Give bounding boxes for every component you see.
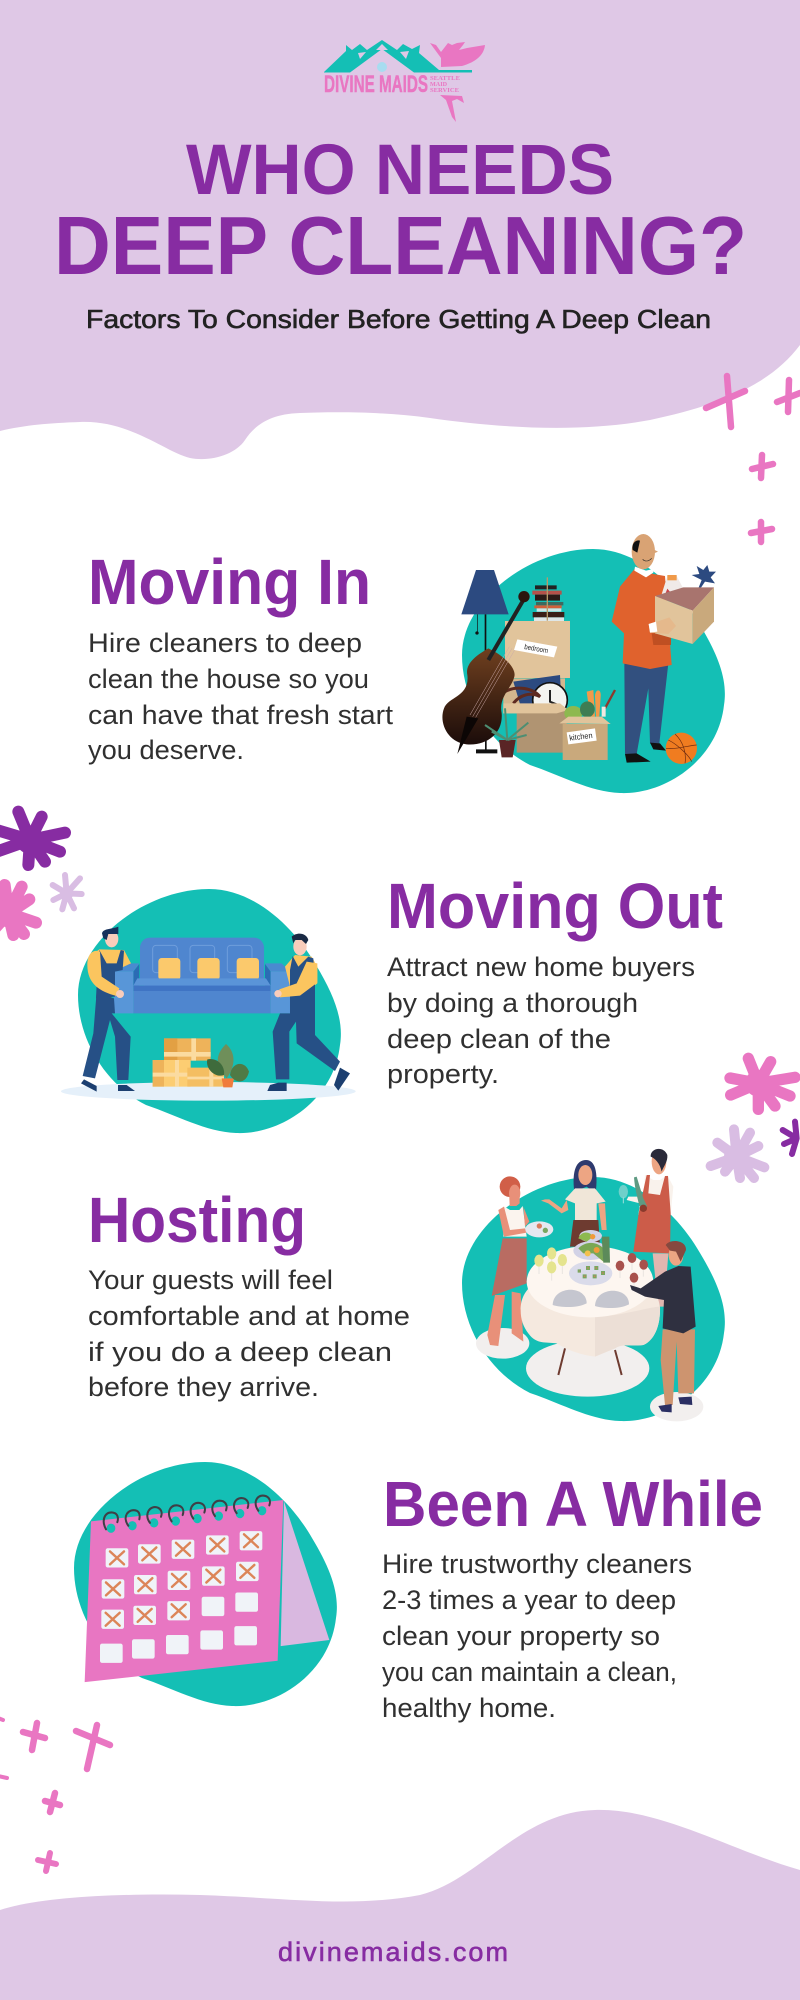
section: Moving In text: you deserve. xyxy=(88,735,244,765)
man in orange sweater holding a box xyxy=(612,534,716,763)
box: kitchen: kitchen xyxy=(569,731,593,743)
box: kitchen xyxy=(559,690,615,760)
box: open with clock and cloth xyxy=(503,675,568,753)
decorative pink sparkles top right xyxy=(706,376,800,542)
calendar day cells xyxy=(100,1531,262,1663)
section: Been A While text: clean your property so xyxy=(382,1621,660,1651)
woman in the middle xyxy=(541,1160,607,1247)
section: Moving Out text: Attract new home buyers xyxy=(387,952,695,982)
section: Moving In text: Moving In xyxy=(88,546,371,618)
basketball xyxy=(666,733,697,764)
box: bedroom with books: bedroom xyxy=(524,642,549,655)
decorative flowers left xyxy=(0,812,82,935)
section: Moving Out text: property. xyxy=(387,1059,499,1089)
double bass xyxy=(442,591,530,754)
man in dark sweater xyxy=(630,1241,696,1412)
section: Moving In text: clean the house so you xyxy=(88,664,369,694)
section: Moving Out text xyxy=(387,870,723,1089)
section: Moving Out text: by doing a thorough xyxy=(387,988,638,1018)
section: Moving In text xyxy=(88,546,394,765)
woman with plate xyxy=(487,1176,553,1346)
section: Moving In text: can have that fresh start xyxy=(88,700,394,730)
section: Hosting text: before they arrive. xyxy=(88,1372,319,1402)
title: WHO NEEDS xyxy=(186,131,614,210)
section: Hosting text: Hosting xyxy=(88,1184,306,1256)
section: Been A While text: Been A While xyxy=(383,1468,763,1540)
box: bedroom with books xyxy=(505,577,570,678)
footer website: divinemaids.com xyxy=(278,1937,508,1967)
potted plant xyxy=(485,708,528,757)
logo: Divine Maids: SERVICE xyxy=(430,88,459,94)
decorative flowers right xyxy=(711,1058,797,1178)
illustration: man moving in with boxes xyxy=(442,534,725,793)
subtitle: Factors To Consider Before Getting A Deep Clean xyxy=(86,304,711,334)
logo: Divine Maids xyxy=(324,40,485,122)
section: Hosting text: comfortable and at home xyxy=(88,1301,410,1331)
section: Hosting text xyxy=(88,1184,410,1402)
woman in apron with bottle and glass xyxy=(619,1149,673,1307)
header background shape xyxy=(0,0,800,459)
logo: Divine Maids: SEATTLE xyxy=(430,76,460,82)
stacked boxes and plant xyxy=(153,1038,249,1087)
title xyxy=(54,131,747,292)
crossed-off marks xyxy=(106,1534,258,1626)
illustration: calendar with crossed-off days xyxy=(74,1462,337,1706)
section: Been A While text: you can maintain a clean, xyxy=(382,1657,677,1687)
illustration: two movers carrying a sofa xyxy=(61,889,356,1133)
mover right xyxy=(267,934,350,1091)
lamp xyxy=(461,570,509,753)
section: Been A While text: healthy home. xyxy=(382,1693,556,1723)
section: Been A While text: 2-3 times a year to deep xyxy=(382,1585,676,1615)
section: Hosting text: Your guests will feel xyxy=(88,1265,333,1295)
section: Moving Out text: Moving Out xyxy=(387,870,723,942)
section: Moving Out text: deep clean of the xyxy=(387,1024,611,1054)
title: DEEP CLEANING? xyxy=(54,199,747,292)
illustration: people hosting around a dinner table xyxy=(462,1149,725,1421)
decorative pink sparkles bottom left xyxy=(0,1718,110,1871)
logo: Divine Maids: MAID xyxy=(430,82,448,88)
mover left xyxy=(81,927,135,1092)
section: Been A While text: Hire trustworthy cleaners xyxy=(382,1549,692,1579)
calendar rings xyxy=(107,1506,266,1533)
section: Moving In text: Hire cleaners to deep xyxy=(88,628,362,658)
dinner table with food xyxy=(521,1230,660,1357)
section: Been A While text xyxy=(382,1468,763,1723)
logo: Divine Maids: DIVINE MAIDS xyxy=(324,71,428,98)
section: Hosting text: if you do a deep clean xyxy=(88,1337,392,1367)
sofa xyxy=(114,938,290,1013)
footer background shape xyxy=(0,1810,800,2000)
